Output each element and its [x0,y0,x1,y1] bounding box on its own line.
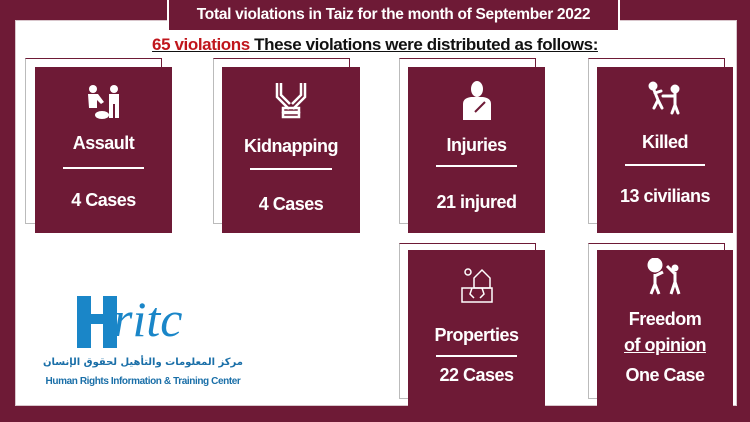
card back: freedom [588,243,725,399]
logo english text: Human Rights Information & Training Center [46,376,240,387]
card back: killed [588,58,725,224]
icon: damaged house [461,268,493,303]
logo [43,291,243,387]
card: freedom of opinion: One Case [625,365,705,385]
card: properties: 22 Cases [439,365,514,385]
card: killed: 13 civilians [620,186,710,206]
card: kidnapping: Kidnapping [244,136,338,156]
card back: properties [399,243,536,399]
card: assault: 4 Cases [71,190,136,210]
card: kidnapping: 4 Cases [259,194,323,214]
card: freedom of opinion: Freedom [629,309,701,329]
card: assault: Assault [73,133,134,153]
icon: shooting [648,82,680,114]
icon: injured person [463,81,491,120]
icon: assault [88,85,119,119]
icon: freedom of opinion [648,258,680,294]
card: kidnapping [222,67,360,233]
card: injuries: 21 injured [436,192,517,212]
card: freedom of opinion [597,250,733,406]
card: killed: Killed [642,132,688,152]
logo mark [77,291,182,348]
card: properties: Properties [434,325,519,345]
card back: assault [25,58,162,224]
card: properties [408,250,545,406]
title [167,0,620,32]
card: killed [597,67,733,233]
logo arabic text: مركز المعلومات والتأهيل لحقوق الإنسان [43,357,243,368]
card: injuries: Injuries [446,135,507,155]
card back: kidnapping [213,58,350,224]
card: freedom of opinion: of opinion [624,335,706,355]
icon: bound hands [276,83,306,118]
card back: injuries [399,58,536,224]
card: assault [35,67,172,233]
card: injuries [408,67,545,233]
subtitle: 65 violations These violations were distributed as follows: [152,35,598,54]
logo mark: ritc [113,291,182,347]
title: Total violations in Taiz for the month of September 2022 [197,6,590,23]
